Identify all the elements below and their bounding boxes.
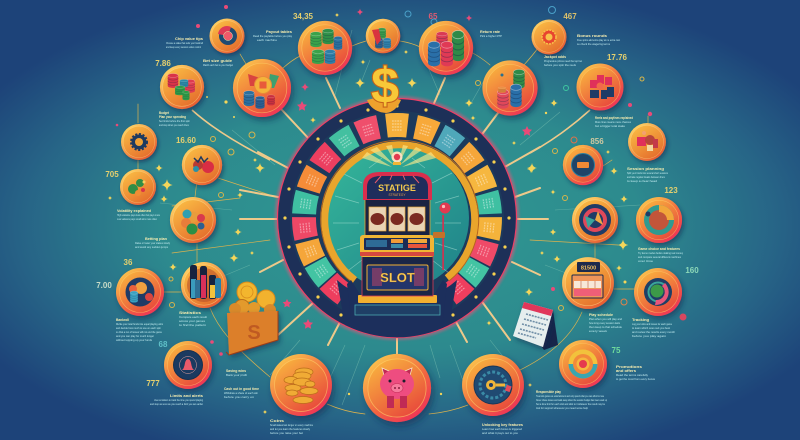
numbers: 160 (685, 266, 699, 275)
caption: jackpot: Progressive prizes need the top bet (544, 59, 582, 63)
caption: budget: Budget (159, 111, 170, 115)
caption: wallet: Bank your profit (226, 373, 247, 377)
caption: wallet: Saving wins (226, 369, 246, 373)
caption: volatility: Low variance pays small wins more often (117, 217, 157, 221)
coin: green chips (298, 21, 352, 75)
numbers: 68 (159, 340, 168, 349)
caption: budget (159, 111, 190, 127)
caption: session: and take regular breaks between them (627, 175, 665, 179)
sparkles (108, 13, 628, 414)
numbers: 75 (612, 346, 621, 355)
caption: budget: and stop when you reach them (159, 123, 189, 127)
coin: gear (121, 124, 157, 160)
caption: tracking: Log your wins and losses for each game (632, 322, 672, 326)
caption: promotions: and offers (616, 369, 636, 373)
caption: alerts: Limits and alerts (170, 394, 203, 398)
wallet with gold coins: S (247, 322, 261, 344)
caption: top left: Read the paytable before you play (253, 34, 292, 38)
caption: bet size: Bet size guide (203, 59, 232, 63)
numbers: 467 (563, 12, 577, 21)
caption: cash out: before you carry on (224, 395, 254, 399)
caption: bankroll: so that a run of losses will not end the game (116, 330, 162, 334)
caption: top right (480, 30, 502, 38)
machine top arch: STRATEGY (389, 193, 406, 197)
coin: gold coin stack (270, 354, 332, 416)
light beams from beacon (362, 145, 436, 167)
bottom dark base of wheel (337, 280, 457, 337)
caption: tracking: Tracking (632, 318, 649, 322)
caption: schedule: every week (589, 329, 608, 333)
caption: bonus rounds (577, 34, 620, 46)
inner dark base (347, 280, 447, 318)
coin: schedule board: 81500 (581, 266, 596, 272)
caption: reels: Reels and paylines explained (595, 116, 633, 120)
caption: schedule: then keep to that schedule (589, 325, 622, 329)
caption: coins: before you raise your bet (270, 431, 303, 435)
caption: betting: and avoid any sudden jumps (135, 245, 168, 249)
coin: piggy bank (363, 354, 431, 422)
caption: coins: and let you learn the features slowly (270, 427, 310, 431)
caption: top right: Pick a higher RTP (480, 34, 502, 38)
numbers (96, 12, 699, 388)
coin: green cluster (120, 169, 156, 205)
numbers: 65 (429, 12, 438, 21)
caption: alerts (150, 394, 203, 406)
caption: chip tips: and keep every session under control (166, 45, 201, 49)
caption: wallet (226, 369, 247, 377)
connecting lines (138, 41, 648, 414)
caption: reels: More lines means more chances (595, 120, 631, 124)
caption: game choice: Try demo modes before staking real money (638, 251, 683, 255)
ring dots (283, 104, 511, 332)
slot machine (355, 152, 450, 315)
caption: bankroll: Bankroll (116, 318, 129, 322)
coin: green blue red stacks (482, 60, 538, 116)
caption: game choice: Game choice and features (638, 247, 680, 251)
caption: jackpot: Jackpot odds (544, 55, 566, 59)
caption: volatility: High variance pays less often but pays more (117, 213, 160, 217)
coin: teal and orange rings (636, 197, 682, 243)
coin: red cluster (182, 145, 222, 185)
caption: jackpot: before you spin the reels (544, 63, 576, 67)
numbers: 856 (590, 137, 604, 146)
machine middle body (365, 199, 430, 236)
caption: key features: Learn how each bonus is triggered (482, 427, 522, 431)
caption: top left (253, 30, 292, 42)
caption: game choice: and compare several different machines (638, 255, 681, 259)
caption: responsible play: Ask for support whenever you need some help (536, 406, 588, 410)
caption: responsible play: Never chase losses and walk away when the session budget has been used up (536, 398, 607, 402)
caption: schedule: Play schedule (589, 313, 613, 317)
numbers: 7.86 (155, 59, 171, 68)
caption: game choice: over time (638, 259, 653, 263)
caption: alerts: and stop as soon as you reach a limit you set earlier (150, 402, 203, 406)
caption: session: to keep a clear head (627, 179, 657, 183)
caption: reels (595, 116, 633, 128)
coin: mixed chips (170, 197, 216, 243)
caption: tracking: before you play again (632, 334, 666, 338)
caption: schedule (589, 313, 622, 333)
caption: chip tips: Chip value tips (175, 37, 203, 41)
control shelf (360, 235, 434, 257)
coin: shield badge with blue chips (233, 59, 291, 117)
caption: tracking (632, 318, 675, 338)
calendar (513, 302, 558, 350)
caption: bankroll: Divide your total funds into equal playing units (116, 322, 163, 326)
machine top arch (363, 172, 432, 200)
coin: bar chart (181, 262, 227, 308)
caption: cash out (224, 387, 259, 399)
coin: orange sun gear (531, 19, 567, 55)
caption: promotions: Read the terms carefully (616, 373, 648, 377)
caption: responsible play: Treat slot games as entertainment and only spend what you can afford to lose (536, 394, 604, 398)
caption: volatility (117, 209, 160, 221)
caption: coins: Coins (270, 419, 284, 423)
caption: bankroll (116, 318, 163, 342)
caption: key features: and what it pays out to you (482, 431, 518, 435)
coin: red and green chips (160, 65, 204, 109)
caption: betting: Raise or lower your stakes slowly (135, 241, 170, 245)
caption: tracking: to learn which ones suit you best (632, 326, 670, 330)
caption: budget: Plan your spending (159, 115, 186, 119)
caption: session: Session planning (627, 167, 664, 171)
caption: statistics: across your games (179, 319, 205, 323)
caption: chip tips: Choose a stake that suits your bankroll (166, 41, 203, 45)
caption: volatility: Volatility explained (117, 209, 151, 213)
caption: responsible play (536, 390, 607, 410)
machine top arch: STATIGE (378, 183, 416, 193)
caption: schedule: how long every session lasts (589, 321, 620, 325)
caption: betting (135, 237, 170, 249)
caption: coins: Small stakes last longer on every machine (270, 423, 313, 427)
caption: session: Split your funds into several short sessions (627, 171, 668, 175)
teal center disc (325, 146, 469, 290)
caption: session (627, 167, 668, 183)
beacon (392, 152, 402, 165)
caption: chip tips (166, 37, 203, 49)
coin: top left dark chip (209, 18, 245, 54)
caption: alerts: Use reminders to track the time you spend playing (154, 398, 203, 402)
coin: tall chip stacks (419, 21, 473, 75)
reels (369, 207, 425, 231)
caption: statistics: Compare each result (179, 315, 207, 319)
machine base (355, 305, 440, 315)
caption: promotions: Promotions (616, 365, 642, 369)
wallet with gold coins (226, 282, 278, 355)
faint background rays (160, 30, 640, 405)
wheel spokes (192, 78, 590, 354)
caption: schedule: Plan when you will play and (589, 317, 622, 321)
caption: bet size (203, 59, 233, 67)
caption: promotions (616, 365, 655, 381)
wheel segments (291, 113, 503, 305)
caption: cash out: Withdraw a share of each win (224, 391, 258, 395)
caption: betting: Betting plan (145, 237, 167, 241)
numbers: 34,35 (293, 12, 314, 21)
caption: bonus rounds: Free spins add extra play at no extra cost (577, 38, 620, 42)
wheel dark ring (278, 98, 516, 338)
caption: bankroll: and you can play for much longer (116, 334, 154, 338)
caption: key features: Unlocking key features (482, 423, 523, 427)
coin: target rings (559, 340, 607, 388)
numbers: 7.00 (96, 281, 112, 290)
center disc rays (333, 158, 461, 273)
numbers: 16.60 (176, 136, 197, 145)
caption: statistics (179, 311, 207, 327)
caption: budget: Set limits before the first spin (159, 119, 190, 123)
caption: coins (270, 419, 313, 435)
coin: pink tiles (628, 123, 666, 161)
wheel: central slot wheel with lit ring and segments (276, 98, 518, 338)
caption: game choice (638, 247, 683, 263)
coin: green and pink dial (634, 268, 682, 316)
numbers: 17.76 (607, 53, 628, 62)
coin: dark disc with chips (116, 268, 164, 316)
caption: jackpot (544, 55, 582, 67)
coin: schedule board (562, 257, 614, 309)
caption: bet size: Match each bet to your budget (203, 63, 233, 67)
numbers: 777 (146, 379, 160, 388)
numbers: 36 (124, 258, 133, 267)
caption: top right: Return rate (480, 30, 500, 34)
caption: top left: each machine (257, 38, 277, 42)
caption: bankroll: without topping up your funds (116, 338, 152, 342)
outer glowing ring (276, 98, 518, 338)
dollar sign: $ (371, 58, 399, 114)
caption: responsible play: Responsible play (536, 390, 561, 394)
coin: dark disc with orange label (563, 145, 603, 185)
caption: bankroll: and decide how much to use on each spin (116, 326, 161, 330)
coin: small chips with red arrow (366, 19, 400, 53)
gold arc (325, 145, 475, 280)
numbers: 123 (664, 186, 678, 195)
coin: colourful dark ring (572, 197, 618, 243)
caption: statistics: to find the pattern (179, 323, 206, 327)
coin: bell dial (164, 341, 212, 389)
caption: top left: Payout tables (266, 30, 292, 34)
coin: key dial (462, 354, 524, 416)
caption: promotions: to get the most from every bonus (616, 377, 655, 381)
coin: red and dark tiles (576, 63, 624, 111)
SLOT panel: SLOT (380, 270, 415, 285)
lever (433, 202, 450, 270)
caption: bonus rounds: Bonus rounds (577, 34, 607, 38)
caption: cash out: Cash out in good time (224, 387, 259, 391)
caption: key features (482, 423, 523, 435)
numbers: 705 (105, 170, 119, 179)
caption: tracking: and review the results every month (632, 330, 675, 334)
SLOT panel (367, 265, 428, 290)
caption: reels: but a bigger total stake (595, 124, 625, 128)
caption: statistics: Statistics (179, 311, 201, 315)
caption: bonus rounds: so check the wagering terms (577, 42, 610, 46)
machine lower body (362, 256, 433, 296)
caption: responsible play: Set a time limit for each visit and stick to it whatever the result may be (536, 402, 605, 406)
